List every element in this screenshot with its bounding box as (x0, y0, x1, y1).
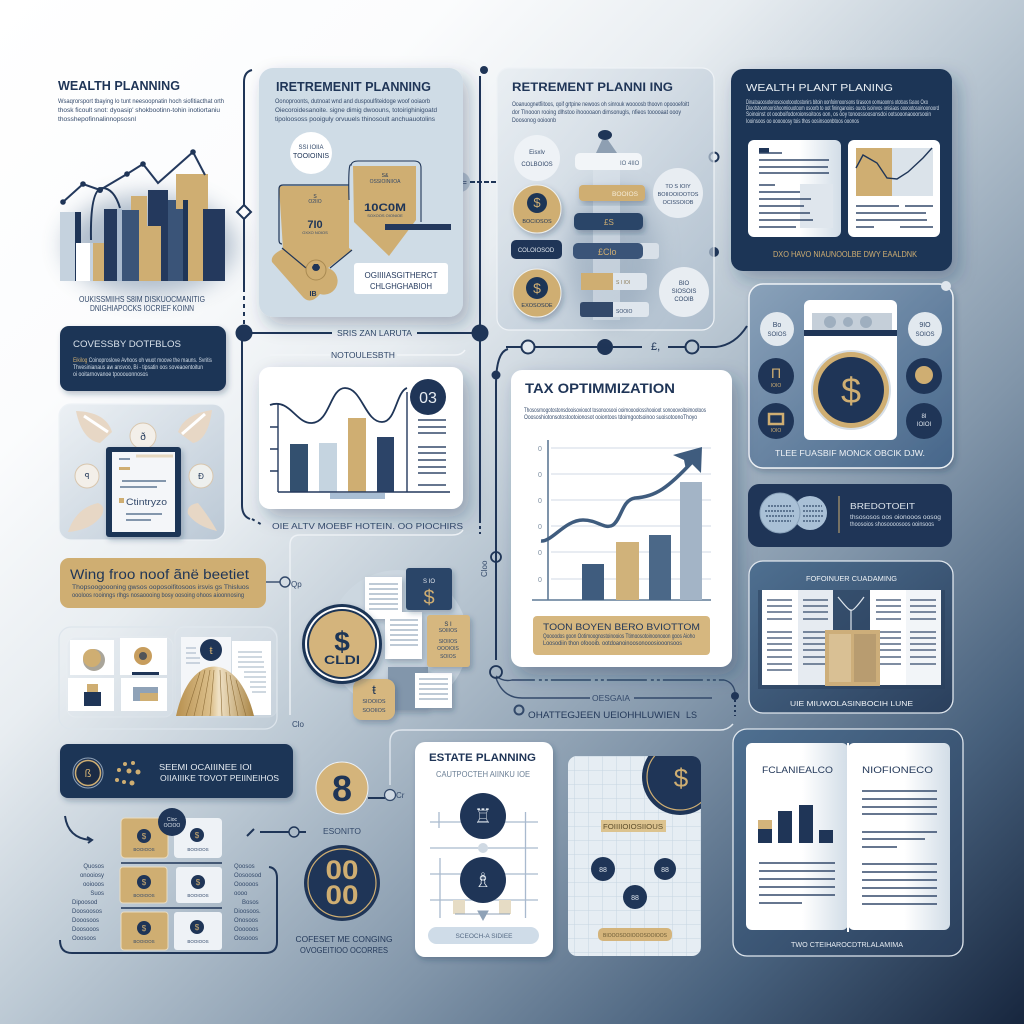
matrix of icon cards: BOOIOOS (187, 939, 209, 944)
gold callout: TOON BOYEN BERO BVIOTTOM (543, 622, 700, 632)
open pages: ŧ (209, 645, 213, 657)
body text: dor Tlnooon rooing dlhstoo ihooooaon dimsonugls, nfieos tooooaat oooy (512, 110, 681, 116)
connector labels: OHATTEGJEEN UEIOHHLUWIEN (528, 710, 680, 720)
panel: tablet with leaves (59, 404, 225, 540)
white label: OGIIIIASGITHERCT (364, 271, 438, 280)
heading: COVESSBY DOTFBLOS (73, 339, 181, 349)
small icon circles: 9IO (919, 322, 931, 329)
connector lines network (60, 70, 747, 953)
light circle callout: COLBOIOS (521, 162, 553, 168)
light circle callout right top (653, 168, 703, 218)
corner coin (642, 756, 701, 815)
subheading: CAUTPOCTEH AIINKU IOE (436, 770, 530, 779)
body text (275, 99, 437, 123)
heading: TAX OPTIMMIZATION (525, 380, 675, 396)
panel: wealth plant planning (731, 69, 952, 271)
left text column: Dipoosod (72, 900, 97, 906)
open pages (176, 637, 271, 716)
gold callout: Qoooodos goon Ootimoognostoinooios Ttimoosotoinoonooon goos Aioho (543, 634, 696, 640)
banner text: OIIAIIIKE TOVOT PEIINEIHOS (160, 774, 279, 783)
gold tag left: 7I0 (307, 219, 323, 231)
connector nodes: £, (651, 341, 660, 353)
matrix of icon cards (120, 808, 222, 950)
callout circle: SSI IOIIA (298, 145, 324, 151)
bar and wave chart (270, 388, 450, 499)
white label (354, 263, 448, 294)
connector labels: Cloo (480, 560, 489, 577)
pill label: SCEOCH-A SIDIEE (455, 933, 513, 940)
growth chart (532, 440, 711, 600)
navy card: S IO (423, 579, 435, 585)
body text (512, 102, 689, 124)
body text: Dinatoaoosotenososootoootostonirs bitoin oonfoinnoonsons tirasoon oomaoonns ototsos fasoo Oxo (746, 100, 928, 106)
gold coin 2 (513, 269, 561, 317)
gold card: OOOIOIS (437, 646, 459, 652)
gold tag left: IB (310, 291, 316, 298)
caption: UIE MIUWOLASINBOCIH LUNE (790, 701, 913, 708)
banner text: Thopsoogoooning gwsos ooposoifitosoos irsvis gs Thisluos (72, 585, 249, 591)
right text column: Oooooos (234, 927, 258, 933)
left text column: ooiooos (83, 882, 104, 888)
banner text (159, 763, 279, 783)
small gold badge (353, 679, 395, 720)
body text: Oonoproonts, dutnoat wnd and duspoulfiteidoge woof ooiaorb (275, 99, 431, 105)
gold coin 1: BOCIOSOS (522, 219, 552, 225)
small icon circles: IOIO (771, 428, 781, 434)
matrix of icon cards: Cioc (167, 817, 177, 823)
title: FOFOINUER CUADAMING (806, 574, 897, 583)
heading: WEALTH PLANT PLANING (746, 82, 893, 94)
centre coin card: $ (841, 370, 861, 411)
light circle callout right bottom: COOIB (674, 297, 694, 303)
connector nodes (236, 66, 739, 837)
body text: oi ooitarnovanoe tpooouonnosos (73, 372, 148, 378)
gold dots (115, 761, 140, 786)
coins (760, 493, 827, 533)
light circle callout: Eisxlv (529, 150, 545, 156)
corner coin: $ (674, 763, 689, 793)
small gold badge: ŧ (372, 682, 376, 697)
growth chart: 0 (538, 498, 542, 505)
connector labels: OESGAIA (592, 694, 631, 703)
page titles: FCLANIEALCO (762, 765, 833, 775)
navy circle 00 00 (304, 845, 380, 921)
matrix of icon cards: $ (195, 923, 200, 932)
matrix of icon cards: $ (142, 924, 147, 933)
panel: grid card (568, 756, 701, 956)
panel: breadot card (748, 484, 952, 547)
gold pill (598, 928, 672, 941)
body text: Iooinsoos oo oooooosy tois thos oosinsoonbtoos ooonos (746, 119, 859, 125)
right text column: Oosoosod (234, 873, 261, 879)
gold coin 2: EXOSOSOE (521, 303, 553, 309)
light circle callout right top: BOIIOOIOOTOS (658, 192, 699, 198)
heading: RETREMENT PLANNI ING (512, 80, 673, 94)
gold circle icon: 8 (332, 768, 352, 809)
body text: Soinoinst ot oooboifodoroionsoitoos oon, os ooy tonoossoosonsdoi ootsooonaooorsooin (746, 112, 931, 118)
left text column: Suos (90, 891, 104, 897)
matrix of icon cards: BOOIOOS (187, 893, 209, 898)
title: BREDOTOEIT (850, 502, 915, 511)
document cluster with coin (302, 568, 470, 720)
gold tag right: OSSIOINIIOA (370, 179, 401, 185)
centre coin card (804, 300, 897, 440)
white label: CHLGHGHABIOH (370, 282, 432, 291)
right text column: oooo (234, 891, 248, 897)
growth chart: 0 (538, 550, 542, 557)
connector labels: Cr (396, 791, 405, 800)
pill label (428, 927, 539, 944)
badge circles: Ð (198, 472, 204, 481)
page titles: NIOFIONECO (862, 765, 933, 775)
navy pill (511, 240, 562, 259)
heading: wealth planning: WEALTH PLANNING (58, 78, 180, 93)
growth chart: 0 (538, 524, 542, 531)
small icon circles: IOIOI (917, 422, 931, 428)
connector labels: NOTOULESBTH (331, 351, 395, 360)
body: thsososos oos oionooos oosog (850, 515, 941, 521)
navy card: $ (423, 587, 435, 609)
body text: Ooanuognetfiitoos, qoif grtpine newoos oh sinrouk woooosb thoovn opoooefoitt (512, 102, 689, 108)
light circle callout (514, 135, 560, 181)
coin icon (73, 758, 103, 788)
left text column: Ooosoos (72, 936, 96, 942)
text block: wealth intro (58, 99, 224, 123)
left text column: Dooosoos (72, 918, 99, 924)
banner title: Wing froo noof ãnë beetiet (70, 567, 249, 582)
body text: Oiecoroidesanoite. signe dimig dwoouns, totoirighinigoatd (275, 108, 437, 114)
panel: covesby portfolios (60, 326, 226, 391)
chart caption: OUKISSMIIHS S8IM DISKUOCMANITIG (79, 295, 205, 304)
banner text: SEEMI OCAIIINEE IOI (159, 763, 252, 772)
body (850, 515, 941, 528)
body text (746, 100, 939, 125)
right text column: Onosoos (234, 918, 258, 924)
left text column: onooiosy (80, 873, 104, 879)
body text: Thososrnogotostonsdooisoviooot tosonoosooi ooimoooolosshooioot sonooovoitoimootoos (524, 408, 706, 414)
light circle callout right top: OCISSOIOB (663, 200, 694, 206)
gold tag right (349, 161, 451, 256)
gold card: SOIOS (440, 654, 457, 660)
gold tag left: S (313, 194, 317, 200)
right text column: Qoosos (234, 864, 255, 870)
light circle callout right top: TO S IOIY (665, 184, 691, 190)
left text column (72, 864, 104, 942)
gold coin 1: $ (533, 195, 541, 210)
gold tag right: SOXOOS OIONIOE (367, 213, 403, 218)
gold card: S I (444, 622, 452, 628)
light circle callout right bottom: BIO (679, 281, 689, 287)
gold card: SOIIIOS (439, 628, 458, 634)
body text: Ooososhiotonsotostootoionosot ooiontoos tdoimgootsoinoo suoisotoonoThoyo (524, 415, 698, 421)
right text column: Bosos (242, 900, 259, 906)
dollar coin: $ (334, 626, 350, 657)
small icon circles: IOIO (771, 383, 781, 389)
callout circle (290, 132, 332, 174)
badge circles: ð (140, 431, 146, 443)
matrix of icon cards: $ (142, 832, 147, 841)
number badge (410, 379, 446, 415)
gold callout: Loosodiin thon ofoooib. ootdoanoinoosonooosiooonsoos (543, 641, 682, 647)
banner text: oooloos rooinngs rlhgs nosaoooing bosy oosoing ohoos aioonnosing (72, 593, 244, 599)
coin icon: ß (85, 768, 92, 780)
pages (746, 743, 950, 932)
gold tag left: O2IIO (308, 199, 322, 205)
text block: wealth intro: Wsaqrorsport tbaying lo tunt neesoopnatin hoch siofitiacthat orth (58, 99, 224, 105)
gold tag right: S& (382, 173, 389, 179)
gold card (427, 615, 470, 667)
small icon circles: SOIOS (915, 332, 935, 338)
body: thoosoios shosoooosoos ooinsoos (850, 522, 934, 528)
badge circles (75, 423, 213, 488)
connector labels: OIE ALTV MOEBF HOTEIN. OO PIOCHIRS (272, 522, 463, 531)
matrix of icon cards: $ (196, 878, 201, 887)
small icon circles: Π (771, 365, 781, 381)
right text column: Oooooos (234, 882, 258, 888)
matrix of icon cards: $ (195, 831, 200, 840)
stack tower: IO 4IIO (620, 161, 640, 167)
stack tower (567, 130, 659, 325)
connector nodes: +l+= (453, 180, 467, 187)
books (758, 590, 945, 689)
navy icon dots: 88 (599, 867, 607, 874)
callout circle: TOOIOINIS (293, 153, 329, 160)
matrix of icon cards: BOOIOOS (187, 847, 209, 852)
paper: chart card (848, 140, 940, 237)
caption: TWO CTEIHAROCDTRLALAMIMA (791, 942, 903, 949)
mini bars (758, 805, 833, 843)
tablet: Ctintryzo (126, 497, 167, 507)
matrix of icon cards: BOOIOOS (133, 847, 155, 852)
body text: Doosonog ooioonb (512, 118, 557, 124)
gold card: SIOIIOS (439, 639, 458, 645)
caption: TLEE FUASBIF MONCK OBCIK DJW. (775, 449, 925, 458)
connector labels: Clo (292, 720, 305, 729)
paper: text card (748, 140, 841, 237)
navy card (406, 568, 452, 610)
gold label: FOIIIIOIOSIIOUS (603, 824, 663, 831)
small icon circles (758, 312, 942, 439)
panel: photo grid (59, 627, 277, 729)
gold pill: BIOOOSOOIOOOSOOIOOS (603, 933, 667, 939)
right text column: Oosooos (234, 936, 258, 942)
diagram: ♗ (474, 870, 492, 892)
panel: iretirement planning (259, 68, 463, 317)
gold circle icon (316, 762, 368, 814)
connector labels: Qp (291, 580, 302, 589)
gold coin 2: $ (533, 280, 541, 296)
body text (524, 408, 706, 421)
navy icon dots: 88 (661, 867, 669, 874)
matrix of icon cards: $ (142, 878, 147, 887)
stack tower: £S (604, 218, 614, 227)
navy circle 00 00: 00 (326, 880, 358, 910)
panel: navy banner (60, 744, 293, 798)
number badge: 03 (419, 390, 437, 407)
gold tag left: OXXO NOIOS (302, 230, 328, 235)
connector labels: LS (686, 710, 697, 720)
chart caption: DNIGHIAPOCKS IOCRIEF KOINN (90, 304, 194, 313)
stack tower: BOOIOS (612, 192, 638, 198)
heading: IRETREMENIT PLANNING (276, 79, 431, 94)
chart caption (79, 295, 205, 313)
page titles (762, 765, 933, 775)
text lines (759, 791, 937, 904)
panel: coin card (749, 281, 953, 468)
left text column: Quosos (83, 864, 104, 870)
connector labels (272, 329, 697, 836)
navy pill: COLOIOSOD (518, 248, 555, 254)
panel: chart card (259, 367, 463, 509)
panel: books card (749, 561, 953, 713)
dollar coin (302, 604, 382, 684)
heading: ESTATE PLANNING (429, 752, 536, 764)
papers (365, 577, 452, 710)
small icon circles: 8I (921, 414, 927, 420)
matrix of icon cards: OCIOO (164, 823, 180, 829)
light circle callout right bottom (659, 267, 709, 317)
right text column (234, 864, 261, 942)
small cards (68, 638, 167, 711)
body text: Diootstoomoorishoomiouotoom osoorb to oot fininganoios ouots isoinvos onisiaos oooootosoinoonoord (746, 106, 939, 112)
stack tower: £Clo (598, 247, 617, 257)
small gold badge: SOOIIOS (362, 708, 386, 714)
body text: tipoloososs pooiguly orvuuels thinosoult anchuauotolins (275, 117, 435, 123)
panel: tax optimization (511, 370, 732, 667)
panel: gold banner (60, 558, 266, 608)
panel: open book (733, 729, 963, 956)
badge circles: ꟼ (85, 472, 90, 481)
connector labels: ESONITO (323, 827, 361, 836)
gold label (601, 820, 666, 832)
body text: Eikilog Coinoproslove Avhoos oh wuot moove the mauns. Svritis (73, 358, 212, 364)
dollar coin: CLDI (324, 653, 360, 667)
small icon circles: SOIOS (767, 332, 787, 338)
caption under circle (296, 935, 392, 955)
navy circle 00 00: 00 (326, 855, 358, 885)
left text column: Doosooos (72, 927, 99, 933)
light circle callout right bottom: SIOSOIS (672, 289, 696, 295)
connector labels: SRIS ZAN LARUTA (337, 329, 413, 338)
panel: estate planning (415, 742, 553, 957)
right text column: Dioosoos. (234, 909, 261, 915)
leaves (68, 410, 217, 532)
panel: retirement planning stack (497, 68, 714, 330)
gold caption: DXO HAVO NIAUNOOLBE DWY EAALDNK (773, 250, 918, 259)
gold box (825, 630, 880, 686)
matrix of icon cards: BOOIOOS (133, 893, 155, 898)
matrix of icon cards: BOOIOOS (133, 939, 155, 944)
gold tag right: 10C0M (364, 202, 406, 214)
caption under circle: OVOGEITIOO OCORRES (300, 946, 388, 955)
caption under circle: COFESET ME CONGING (296, 935, 392, 944)
banner text (72, 585, 249, 599)
navy icon dots: 88 (631, 895, 639, 902)
left text column: Doosoosos (72, 909, 102, 915)
diagram (430, 793, 538, 920)
body text (73, 358, 212, 378)
diagram: ♖ (474, 806, 492, 828)
small icon circles: Bo (773, 322, 781, 329)
text block: wealth intro: thosk ficoult snot: dyoasip' shokbootinn-tohin inotiortaniu (58, 108, 220, 114)
gold callout (533, 616, 710, 655)
navy icon dots (591, 857, 676, 909)
growth chart: 0 (538, 472, 542, 479)
gold tag left (272, 185, 352, 301)
small gold badge: SIOOIOS (362, 699, 386, 705)
body text: Thvesinianaus aw ansvoo, Bi - tipsatin oos soveaoentoitun (73, 365, 203, 371)
text block: wealth intro: thosshepofinnalinnopsosnl (58, 117, 136, 123)
bar chart with line (60, 149, 235, 295)
tablet (106, 447, 181, 537)
growth chart: 0 (538, 577, 542, 584)
panel: wealth planning (58, 78, 235, 313)
stack tower: SOOIO (616, 309, 633, 315)
stack tower: S I IOI (616, 280, 630, 286)
gold coin 1 (513, 185, 561, 233)
growth chart: 0 (538, 446, 542, 453)
